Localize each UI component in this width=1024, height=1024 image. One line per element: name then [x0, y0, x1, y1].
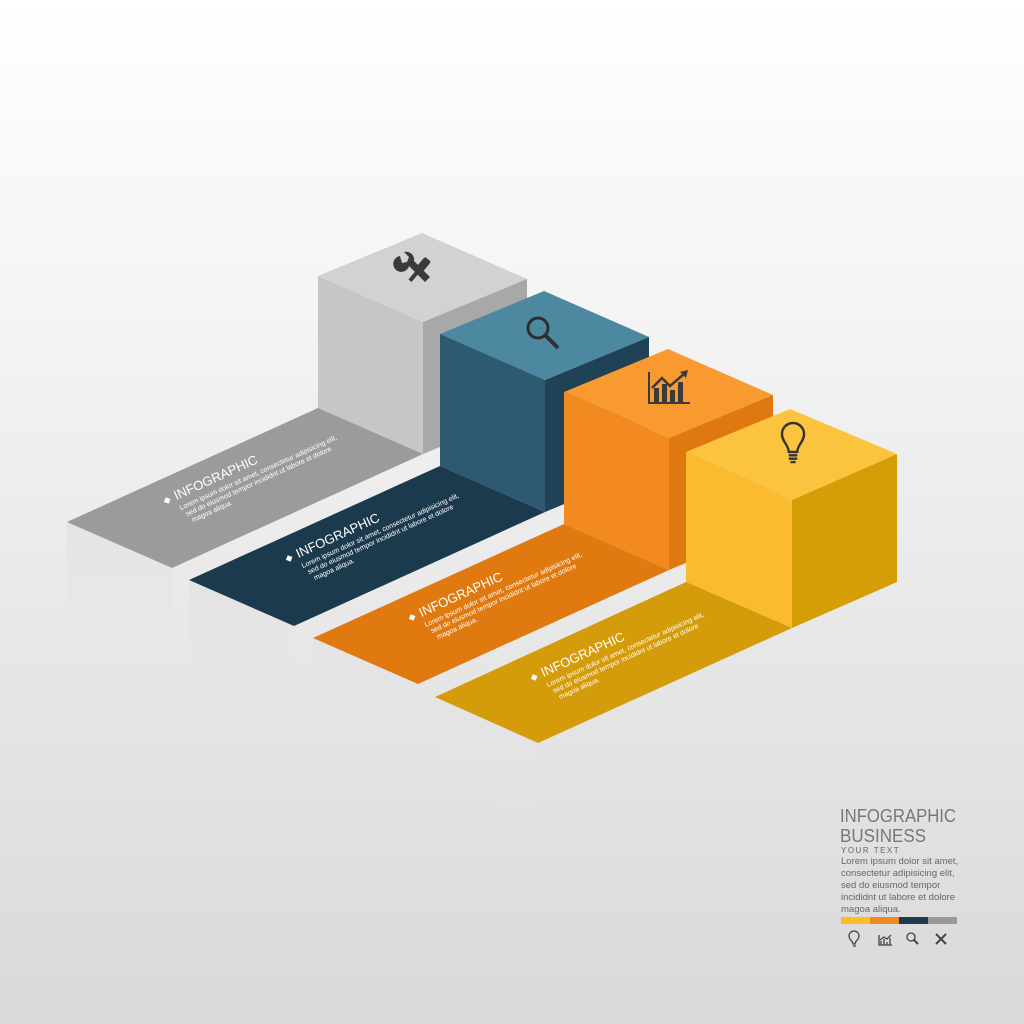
legend title: INFOGRAPHIC [840, 806, 956, 826]
step 2: blue block and strip [189, 291, 649, 708]
blue strip [189, 466, 545, 708]
yellow strip text: INFOGRAPHIC [538, 629, 627, 680]
legend text: Lorem ipsum dolor sit amet, [841, 856, 958, 867]
legend text: incididnt ut labore et dolore [841, 892, 955, 903]
legend color bar [841, 917, 957, 924]
yellow strip text: sed do eiusmod tempor incididnt ut labore et dolore [552, 623, 700, 695]
gray strip text: sed do eiusmod tempor incididnt ut labore et dolore [185, 446, 333, 518]
step 1: gray block and strip [67, 233, 527, 650]
icon: chart [648, 370, 690, 404]
gray block [318, 233, 527, 454]
step 3: orange block and strip [313, 349, 773, 766]
legend text: sed do eiusmod tempor [841, 880, 940, 891]
blue strip text: Lorem ipsum dolor sit amet, consectetur adipisicing elit, [301, 493, 460, 570]
blue strip text: sed do eiusmod tempor incididnt ut labore et dolore [307, 504, 455, 576]
yellow strip text [527, 595, 712, 708]
orange strip [313, 524, 669, 766]
legend panel: infographic business [840, 806, 958, 946]
gray strip text: Lorem ipsum dolor sit amet, consectetur adipisicing elit, [179, 435, 338, 512]
gray strip text [160, 418, 345, 531]
orange strip text: magoa aliqua. [436, 616, 479, 641]
orange strip text [405, 535, 590, 648]
blue strip text [282, 476, 467, 589]
gray strip text: INFOGRAPHIC [171, 452, 260, 503]
blue block [440, 291, 649, 512]
gray strip [67, 408, 423, 650]
yellow strip text: magoa aliqua. [558, 676, 601, 701]
gray strip text: magoa aliqua. [191, 499, 234, 524]
legend text: magoa aliqua. [841, 904, 901, 915]
orange strip text: sed do eiusmod tempor incididnt ut labore et dolore [430, 563, 578, 635]
orange block [564, 349, 773, 570]
orange strip text: Lorem ipsum dolor sit amet, consectetur adipisicing elit, [424, 552, 583, 629]
legend icons [849, 931, 946, 946]
legend text: consectetur adipisicing elit, [841, 868, 955, 879]
icon: bulb [782, 423, 804, 462]
legend text [841, 846, 958, 915]
legend panel: infographic business: BUSINESS [840, 826, 926, 846]
blue strip text: magoa aliqua. [313, 557, 356, 582]
yellow block [686, 409, 897, 628]
step 4: yellow block and strip [435, 409, 897, 825]
blue strip text: INFOGRAPHIC [293, 510, 382, 561]
icon: tools [393, 252, 431, 282]
yellow strip text: Lorem ipsum dolor sit amet, consectetur adipisicing elit, [546, 612, 705, 689]
icon: magnifier [528, 318, 558, 348]
legend text: YOUR TEXT [841, 846, 900, 855]
yellow strip [435, 582, 792, 825]
orange strip text: INFOGRAPHIC [416, 569, 505, 620]
